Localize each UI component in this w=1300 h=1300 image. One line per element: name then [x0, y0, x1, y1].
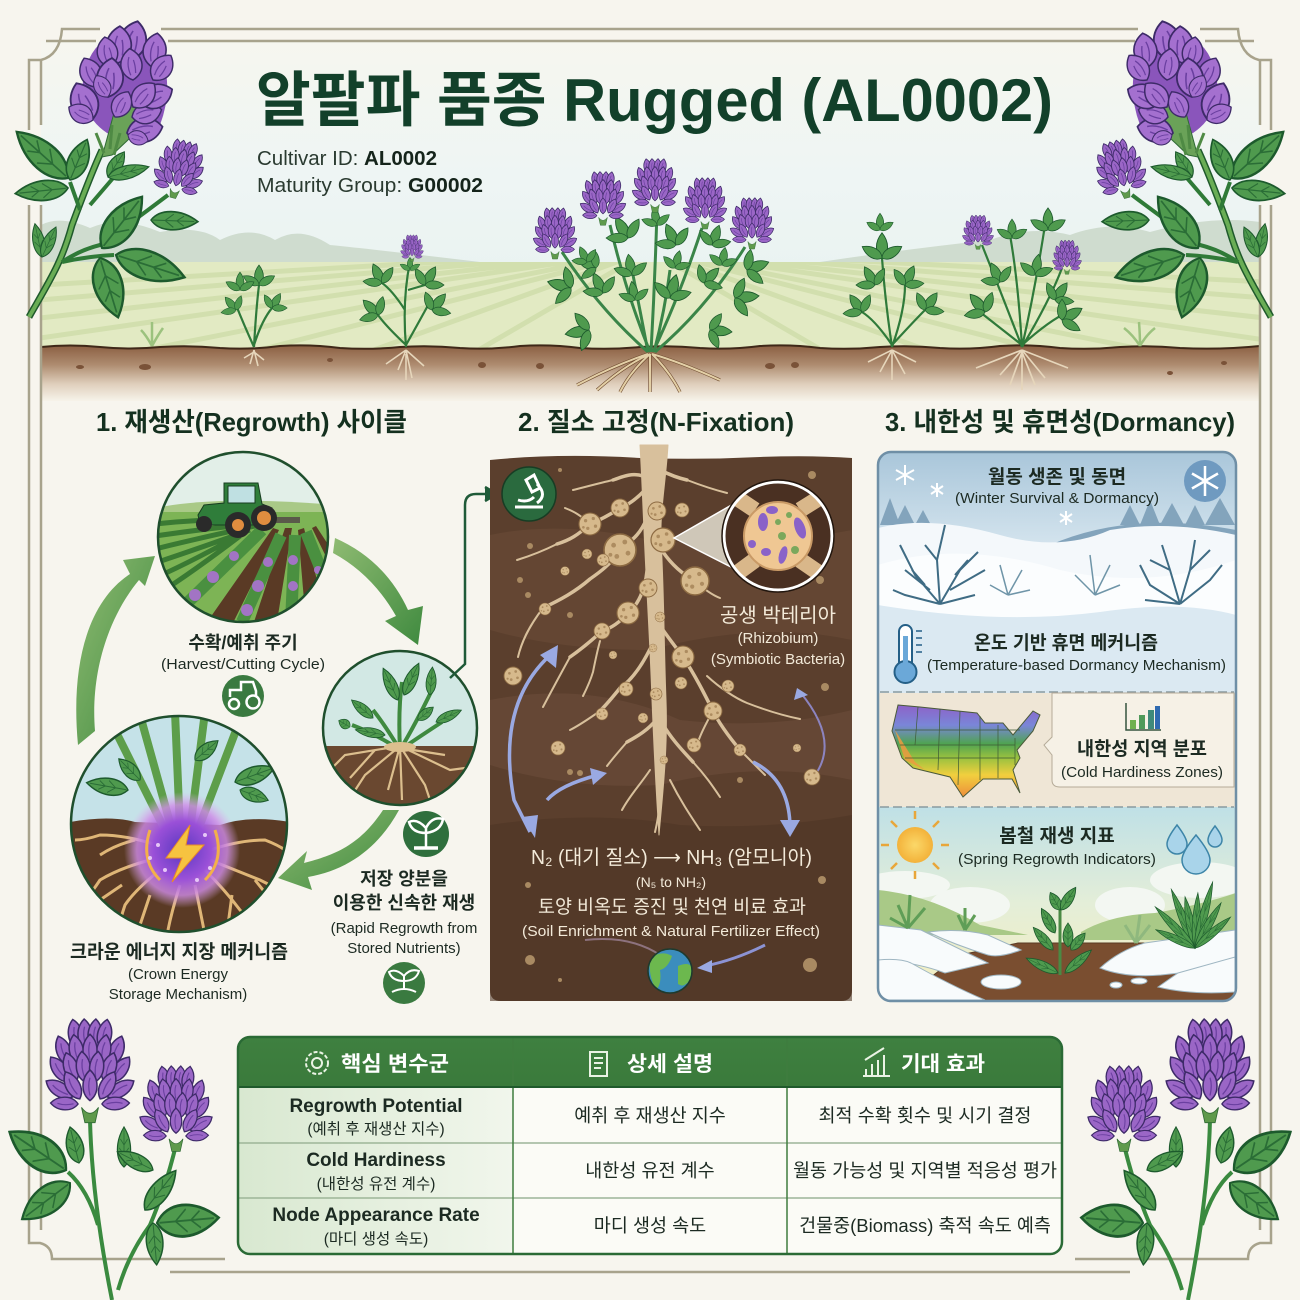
callout: hardiness zones: (Cold Hardiness Zones) — [1061, 764, 1223, 781]
label: rhizobium: 공생 박테리아 — [720, 604, 836, 627]
table: key variables — [238, 1037, 1062, 1254]
icon: gear — [306, 1052, 328, 1074]
label: harvest — [161, 633, 325, 673]
icon: sprout — [403, 811, 449, 857]
table header: 핵심 변수군 — [341, 1053, 449, 1076]
icon: growth chart — [863, 1048, 890, 1076]
icon: tractor — [222, 675, 264, 717]
small plant stages — [141, 158, 1155, 392]
row: cold hardiness — [306, 1150, 1057, 1193]
row: node appearance rate: Node Appearance Rate — [272, 1205, 480, 1226]
soil specks — [517, 468, 829, 982]
grass sprout right — [1124, 322, 1155, 346]
nodules — [504, 499, 820, 785]
label: nitrogen conversion: (Soil Enrichment & Natural Fertilizer Effect) — [522, 923, 820, 940]
arrow: harvest to regrowth — [333, 538, 423, 645]
chart icon — [1126, 703, 1161, 730]
row: node appearance rate: 마디 생성 속도 — [594, 1215, 706, 1236]
cultivar meta text: Cultivar ID: AL0002 — [257, 148, 437, 170]
central mature plant — [532, 158, 776, 392]
image: regrowth circle — [320, 650, 480, 806]
image: crown energy circle — [70, 712, 290, 935]
label: spring regrowth: (Spring Regrowth Indicators) — [958, 851, 1156, 868]
label: rapid regrowth: Stored Nutrients) — [347, 940, 461, 957]
row: cold hardiness: 내한성 유전 계수 — [585, 1160, 715, 1181]
row: regrowth potential: 최적 수확 횟수 및 시기 결정 — [819, 1105, 1031, 1126]
row: node appearance rate — [272, 1205, 1051, 1248]
plant stage 4 — [835, 213, 952, 380]
plant stage 1 — [214, 265, 293, 366]
icon: snowflake small — [896, 465, 1072, 525]
corner plant: bottom right — [1080, 1018, 1299, 1300]
callout: hardiness zones — [1044, 693, 1234, 787]
icon: microscope — [502, 467, 556, 521]
row: regrowth potential: Regrowth Potential — [289, 1096, 463, 1117]
row: regrowth potential — [289, 1096, 1031, 1138]
connector arrow to N-fixation — [450, 487, 497, 678]
plant stage 2 — [350, 235, 460, 380]
icon: snowflake badge — [1184, 460, 1226, 502]
label: rapid regrowth: (Rapid Regrowth from — [331, 920, 477, 937]
label: winter survival: (Winter Survival & Dormancy) — [955, 490, 1159, 507]
corner plant: bottom left — [1, 1018, 220, 1300]
heading: section 3: 3. 내한성 및 휴면성(Dormancy) — [885, 407, 1235, 437]
icon: sprout small — [383, 962, 425, 1004]
clouds — [879, 862, 1235, 922]
image: harvest field circle — [155, 450, 335, 628]
label: winter survival: 월동 생존 및 동면 — [988, 466, 1126, 488]
callout: nodule cross-section — [674, 480, 834, 592]
icon: sun — [881, 811, 949, 879]
panel: cold hardiness and dormancy — [860, 452, 1250, 1001]
map: hardiness zones — [892, 705, 1040, 797]
blue flow arrows — [509, 650, 825, 966]
distant treeline — [880, 498, 1235, 542]
label: nitrogen conversion: N₂ (대기 질소) ⟶ NH₃ (암모니아) — [531, 846, 812, 869]
label: nitrogen conversion: 토양 비옥도 증진 및 천연 비료 효과 — [538, 896, 806, 918]
spring grasses — [890, 895, 1150, 943]
label: temperature mechanism: (Temperature-based Dormancy Mechanism) — [927, 657, 1226, 674]
callout: hardiness zones: 내한성 지역 분포 — [1077, 738, 1207, 760]
row: regrowth potential: (예취 후 재생산 지수) — [307, 1120, 445, 1138]
label: rhizobium: (Symbiotic Bacteria) — [711, 651, 845, 668]
corner plant: top left — [8, 18, 213, 321]
icon: document — [590, 1052, 607, 1076]
taproot and branches — [517, 445, 800, 835]
corner plant: top right — [1087, 18, 1292, 321]
heading: section 2: 2. 질소 고정(N-Fixation) — [518, 407, 794, 437]
icon: globe — [648, 949, 694, 993]
arrow: regrowth to crown — [278, 810, 399, 890]
label: temperature mechanism — [927, 632, 1226, 674]
label: nitrogen conversion — [522, 846, 820, 940]
panel: nitrogen fixation — [490, 445, 852, 1001]
label: rhizobium: (Rhizobium) — [738, 630, 818, 647]
label: harvest: 수확/예취 주기 — [188, 633, 298, 653]
label: crown energy — [70, 941, 288, 1003]
row: node appearance rate: (마디 생성 속도) — [324, 1230, 428, 1248]
label: crown energy: Storage Mechanism) — [109, 986, 247, 1003]
label: crown energy: 크라운 에너지 지장 메커니즘 — [70, 941, 288, 963]
heading: section 1: 1. 재생산(Regrowth) 사이클 — [96, 407, 407, 437]
row: cold hardiness: 월동 가능성 및 지역별 적응성 평가 — [793, 1160, 1057, 1181]
table header: 상세 설명 — [627, 1053, 713, 1076]
row: regrowth potential: 예취 후 재생산 지수 — [574, 1105, 726, 1126]
label: nitrogen conversion: (N₅ to NH₂) — [636, 874, 706, 890]
icon: water drops — [1167, 825, 1222, 874]
label: rapid regrowth: 이용한 신속한 재생 — [333, 893, 475, 913]
label: harvest: (Harvest/Cutting Cycle) — [161, 657, 325, 673]
title: 알팔파 품종 Rugged (AL0002) — [256, 67, 1053, 134]
arrow: crown to harvest — [76, 556, 155, 745]
cultivar meta text — [257, 148, 483, 197]
grass sprout left — [141, 322, 163, 346]
plant stage 5 — [955, 208, 1092, 390]
table header — [238, 1037, 1062, 1087]
label: spring regrowth — [958, 825, 1156, 868]
icon: thermometer — [894, 625, 922, 683]
label: rapid regrowth — [331, 869, 477, 957]
label: winter survival — [955, 466, 1159, 507]
label: rapid regrowth: 저장 양분을 — [360, 869, 448, 889]
cultivar meta text: Maturity Group: G00002 — [257, 175, 483, 197]
label: crown energy: (Crown Energy — [128, 966, 229, 983]
hero landscape — [41, 163, 1260, 400]
row: cold hardiness: Cold Hardiness — [306, 1150, 446, 1171]
row: cold hardiness: (내한성 유전 계수) — [317, 1175, 435, 1193]
panel: regrowth cycle — [70, 450, 497, 1004]
label: spring regrowth: 봄철 재생 지표 — [999, 825, 1115, 847]
label: temperature mechanism: 온도 기반 휴면 메커니즘 — [974, 632, 1158, 654]
table header: 기대 효과 — [901, 1053, 985, 1076]
row: node appearance rate: 건물중(Biomass) 축적 속도 예측 — [799, 1215, 1051, 1236]
label: rhizobium — [711, 604, 845, 668]
